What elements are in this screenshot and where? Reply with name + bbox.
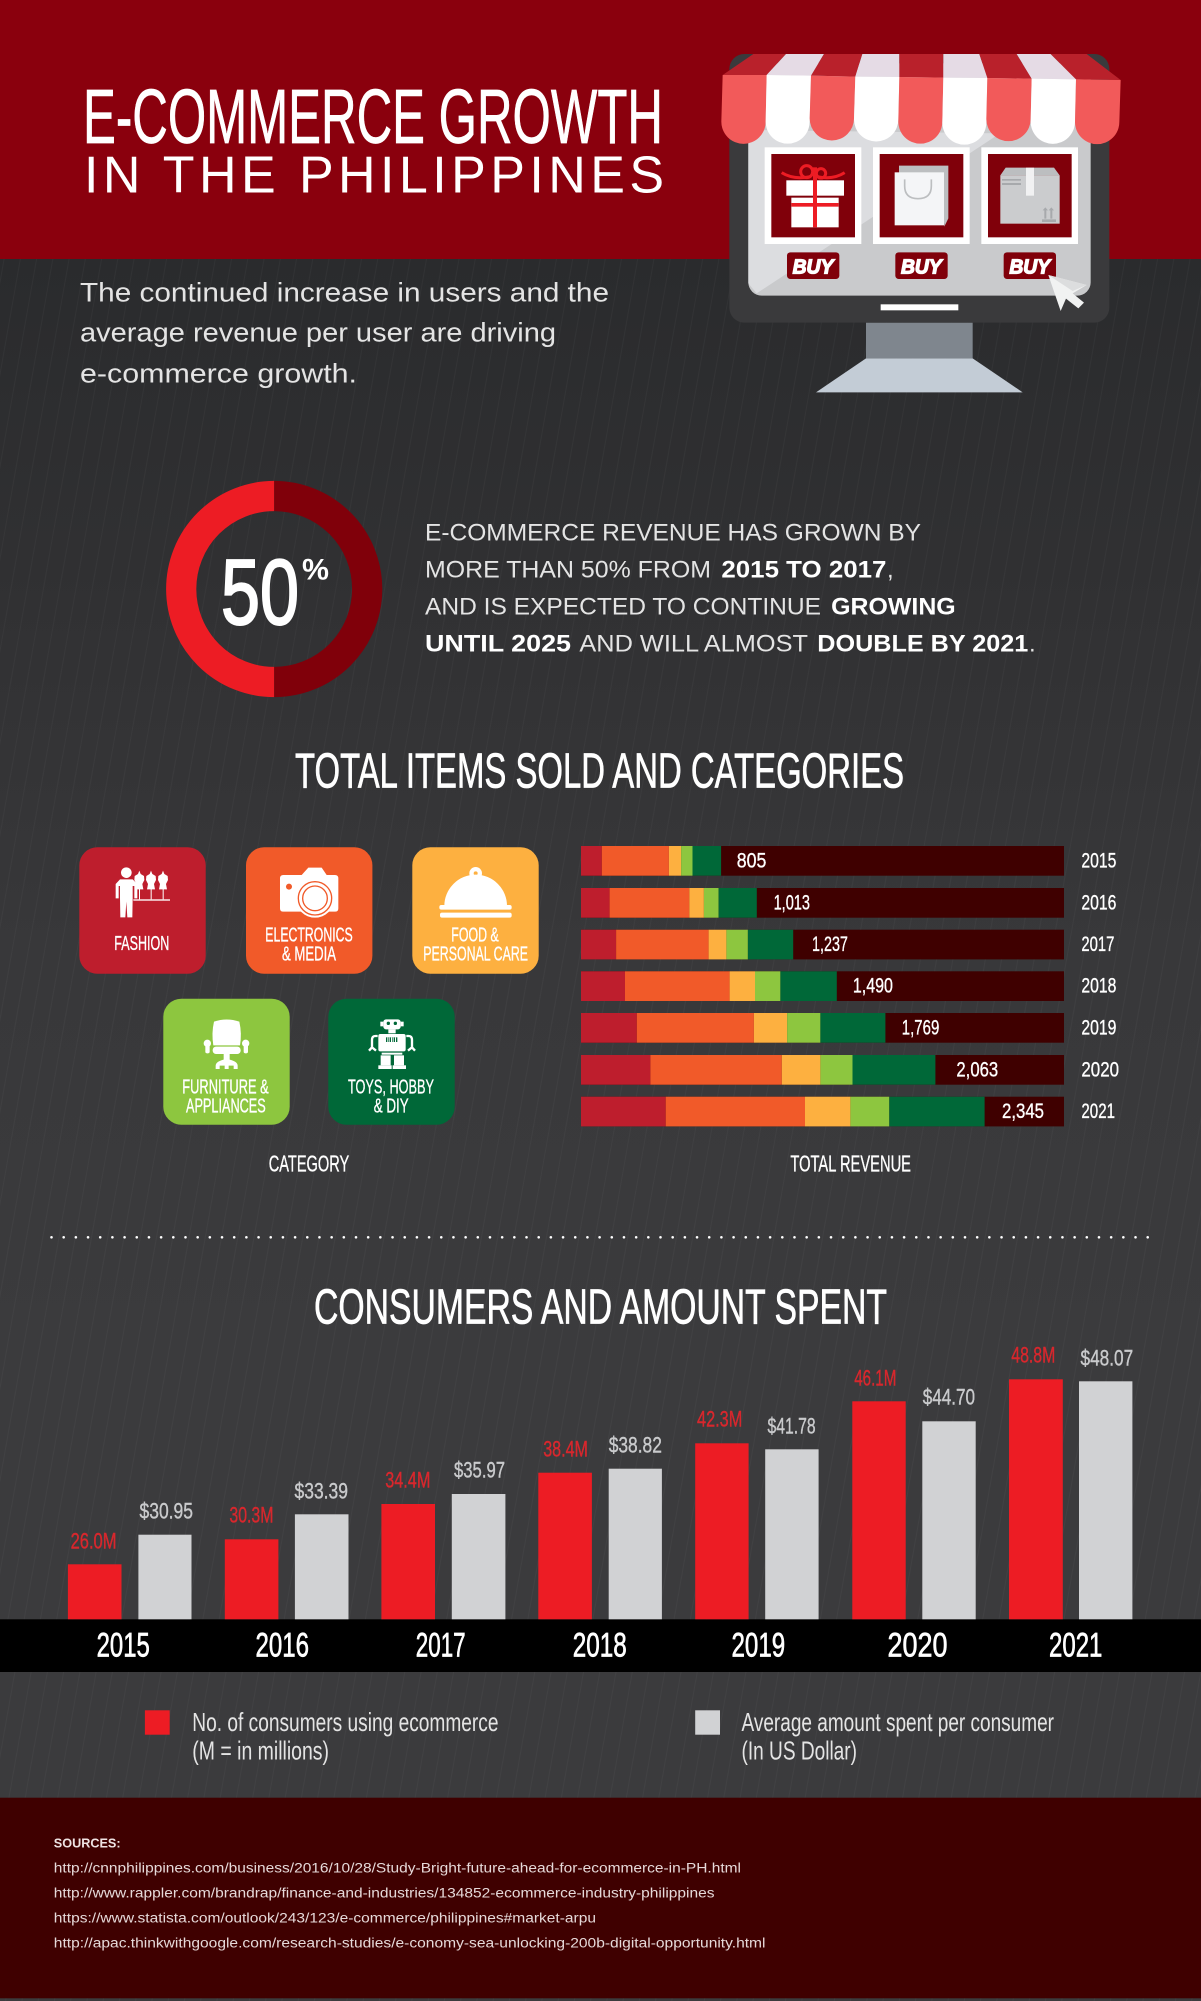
header band xyxy=(0,0,1201,259)
category tile: electronics and media: & MEDIA xyxy=(282,944,336,966)
title xyxy=(83,74,664,205)
title: E-COMMERCE GROWTH xyxy=(83,74,663,160)
group 2016: $33.39 xyxy=(294,1478,348,1503)
year axis band xyxy=(0,1619,1201,1672)
group 2017: $35.97 xyxy=(454,1457,505,1482)
sources panel: http://www.rappler.com/brandrap/finance-and-industries/134852-ecommerce-industry-philippines xyxy=(54,1886,715,1901)
group 2016: 30.3M xyxy=(229,1502,273,1527)
category tile: fashion: FASHION xyxy=(114,933,169,955)
bar 2016: 1,013 xyxy=(774,891,810,914)
heading: total items sold: TOTAL ITEMS SOLD AND CATEGORIES xyxy=(295,743,904,798)
sources panel xyxy=(0,1798,1201,1998)
group 2017 xyxy=(381,1457,505,1665)
category tile: fashion xyxy=(79,847,206,974)
bar 2018: 2018 xyxy=(1081,975,1116,998)
group 2021: $48.07 xyxy=(1080,1345,1133,1370)
category tile: toys, hobby and DIY xyxy=(328,999,455,1125)
revenue growth statement: . xyxy=(1029,631,1036,658)
bar chart: consumers and amount spent xyxy=(68,1343,1133,1665)
revenue growth statement: AND WILL ALMOST xyxy=(579,631,808,658)
bar 2018 xyxy=(581,971,1116,1001)
bar 2017 xyxy=(581,930,1114,959)
group 2021: 2021 xyxy=(1049,1627,1102,1665)
group 2019: $41.78 xyxy=(768,1413,816,1438)
intro text: e-commerce growth. xyxy=(80,358,357,388)
revenue growth statement: GROWING xyxy=(831,594,956,621)
group 2020: 2020 xyxy=(888,1627,948,1665)
bar 2021: 2021 xyxy=(1081,1100,1115,1123)
group 2018: 38.4M xyxy=(543,1437,588,1462)
group 2019: 2019 xyxy=(732,1627,785,1665)
title: IN THE PHILIPPINES xyxy=(84,147,664,205)
group 2021 xyxy=(1009,1343,1133,1665)
category tile: furniture and appliances: APPLIANCES xyxy=(186,1095,266,1117)
heading: consumers and amount spent: CONSUMERS AND AMOUNT SPENT xyxy=(314,1279,887,1334)
group 2018: $38.82 xyxy=(609,1432,662,1457)
home bar xyxy=(881,304,958,310)
bar 2020: 2,063 xyxy=(956,1058,998,1081)
awning xyxy=(721,54,1121,145)
label: total revenue: TOTAL REVENUE xyxy=(790,1151,911,1177)
buy button 2: BUY xyxy=(901,255,944,278)
product tile: box xyxy=(981,147,1078,244)
monitor stand xyxy=(816,323,1023,392)
legend: average spend: (In US Dollar) xyxy=(742,1735,857,1765)
buy button 1: BUY xyxy=(793,255,835,278)
revenue growth statement xyxy=(425,520,1036,658)
category tile: food and personal care: PERSONAL CARE xyxy=(423,944,528,966)
bar 2016 xyxy=(581,888,1116,918)
bar 2020 xyxy=(581,1055,1119,1085)
group 2018: 2018 xyxy=(573,1627,627,1665)
sources panel: https://www.statista.com/outlook/243/123/e-commerce/philippines#market-arpu xyxy=(54,1911,596,1926)
category tile: electronics and media: ELECTRONICS xyxy=(265,925,353,947)
bar 2020: 2020 xyxy=(1081,1058,1119,1081)
buy button 3: BUY xyxy=(1009,255,1052,278)
group 2020 xyxy=(852,1365,976,1665)
category tile: toys, hobby and DIY: & DIY xyxy=(374,1095,409,1117)
bar 2019: 2019 xyxy=(1081,1016,1116,1039)
product tile: shopping bag xyxy=(873,147,970,244)
legend: average spend: Average amount spent per consumer xyxy=(742,1707,1054,1737)
category tile: food and personal care: FOOD & xyxy=(451,925,499,947)
bar 2015 xyxy=(581,846,1116,876)
group 2019: 42.3M xyxy=(697,1407,742,1432)
bar 2017: 2017 xyxy=(1081,933,1114,956)
revenue growth statement: DOUBLE BY 2021 xyxy=(817,631,1028,658)
label: category: CATEGORY xyxy=(269,1151,349,1177)
bar 2018: 1,490 xyxy=(853,975,893,998)
category tile: furniture and appliances xyxy=(163,999,290,1125)
cursor arrow xyxy=(1048,275,1087,311)
monitor frame xyxy=(729,54,1109,323)
donut chart: 50%: % xyxy=(302,553,329,586)
bar 2019 xyxy=(581,1013,1116,1043)
legend: consumers xyxy=(145,1707,498,1765)
sources panel: SOURCES: xyxy=(54,1837,121,1851)
group 2020: $44.70 xyxy=(923,1384,975,1409)
category tile: toys, hobby and DIY: TOYS, HOBBY xyxy=(348,1076,434,1098)
revenue growth statement: AND IS EXPECTED TO CONTINUE xyxy=(425,594,821,621)
donut chart: 50% xyxy=(181,496,367,682)
icon: robot xyxy=(369,1019,415,1069)
group 2020: 46.1M xyxy=(854,1365,896,1390)
sources panel: http://apac.thinkwithgoogle.com/research-studies/e-conomy-sea-unlocking-200b-digital-opportunity.html xyxy=(54,1936,766,1951)
bar 2021: 2,345 xyxy=(1002,1100,1044,1123)
revenue growth statement: E-COMMERCE REVENUE HAS GROWN BY xyxy=(425,520,921,547)
group 2017: 34.4M xyxy=(385,1467,430,1492)
group 2019 xyxy=(695,1407,819,1665)
group 2015 xyxy=(68,1498,193,1665)
group 2016: 2016 xyxy=(256,1627,309,1665)
group 2017: 2017 xyxy=(416,1627,466,1665)
group 2015: $30.95 xyxy=(140,1498,193,1523)
group 2015: 26.0M xyxy=(71,1528,116,1553)
sources panel: http://cnnphilippines.com/business/2016/10/28/Study-Bright-future-ahead-for-ecommerce-in-PH.html xyxy=(54,1861,741,1876)
group 2015: 2015 xyxy=(97,1627,150,1665)
bar 2015: 805 xyxy=(737,849,766,872)
revenue growth statement: UNTIL 2025 xyxy=(425,631,571,658)
group 2018 xyxy=(538,1432,662,1665)
bar 2015: 2015 xyxy=(1081,849,1116,872)
stacked bar chart: total revenue xyxy=(581,846,1119,1126)
icon: person with mannequins xyxy=(116,867,170,917)
group 2021: 48.8M xyxy=(1011,1343,1055,1368)
icon: cloche xyxy=(439,867,512,918)
legend: consumers: No. of consumers using ecommerce xyxy=(192,1707,499,1737)
bar 2019: 1,769 xyxy=(902,1016,939,1039)
icon: chair xyxy=(204,1019,249,1069)
revenue growth statement: , xyxy=(887,557,894,584)
bar 2016: 2016 xyxy=(1081,891,1116,914)
revenue growth statement: MORE THAN 50% FROM xyxy=(425,557,711,584)
icon: camera xyxy=(280,868,338,918)
illustration: online store monitor xyxy=(721,54,1121,392)
revenue growth statement: 2015 TO 2017 xyxy=(721,557,886,584)
intro text xyxy=(80,277,609,388)
donut chart: 50%: 50 xyxy=(221,540,299,644)
group 2016 xyxy=(225,1478,348,1665)
category tile: food and personal care xyxy=(412,847,539,974)
category tile: furniture and appliances: FURNITURE & xyxy=(182,1076,269,1098)
legend: average spend xyxy=(695,1707,1054,1765)
legend: consumers: (M = in millions) xyxy=(192,1735,329,1765)
intro text: The continued increase in users and the xyxy=(80,277,609,307)
bar 2021 xyxy=(581,1097,1115,1126)
monitor screen xyxy=(748,63,1091,296)
bar 2017: 1,237 xyxy=(812,933,848,956)
product tile: gift xyxy=(765,147,861,244)
category tile: electronics and media xyxy=(246,847,372,974)
intro text: average revenue per user are driving xyxy=(80,318,556,348)
